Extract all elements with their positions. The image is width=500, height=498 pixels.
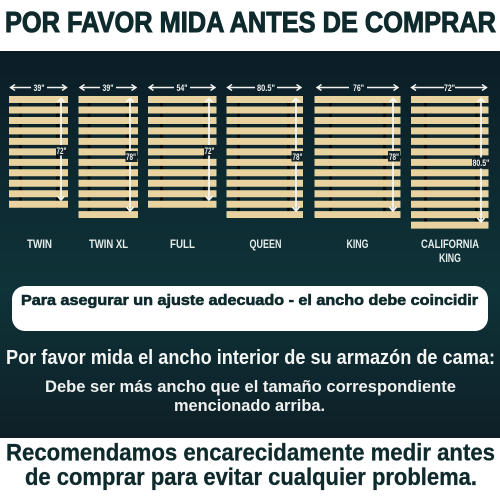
length arrow: 72 in: 72"	[204, 146, 214, 157]
length arrow: 78 in	[292, 98, 303, 211]
text block: must be wider: Debe ser más ancho que el tamaño correspondiente	[45, 378, 456, 396]
label: california king: CALIFORNIA	[421, 239, 479, 251]
callout text: Para asegurar un ajuste adecuado - el ancho debe coincidir	[21, 292, 478, 309]
panel: twin size	[10, 83, 68, 251]
length arrow: 72 in	[56, 98, 68, 200]
length arrow: 78 in	[388, 98, 400, 211]
slatted frame: queen	[237, 96, 290, 218]
header band	[0, 0, 500, 51]
panel: full size	[149, 83, 216, 251]
slatted frame: king	[329, 96, 386, 218]
label: california king	[421, 239, 479, 265]
label: twin xl: TWIN XL	[89, 239, 128, 251]
length arrow: 72 in: 72"	[56, 146, 66, 157]
label: queen: QUEEN	[250, 239, 282, 251]
width arrow: 72 in	[412, 83, 487, 94]
footer band	[0, 438, 500, 498]
length arrow: 78 in: 78"	[292, 152, 302, 163]
width arrow: 80.5 in: 80.5"	[257, 83, 275, 94]
width arrow: 76 in: 76"	[353, 83, 364, 94]
length arrow: 72 in	[204, 98, 216, 200]
width arrow: 54 in: 54"	[176, 83, 188, 94]
callout: width must match	[12, 286, 488, 331]
width arrow: 80.5 in	[228, 83, 302, 94]
slatted frame: twin	[19, 96, 59, 208]
label: california king: KING	[439, 253, 461, 265]
width arrow: 39 in: 39"	[102, 83, 114, 94]
length arrow: 78 in	[126, 98, 138, 211]
length arrow: 78 in: 78"	[389, 152, 399, 163]
dark background panel	[0, 51, 500, 438]
panel: twin xl size	[80, 83, 138, 251]
text block: must be wider	[45, 378, 456, 415]
label: king: KING	[346, 239, 369, 251]
panel: king size	[317, 83, 400, 251]
length arrow: 78 in: 78"	[126, 152, 136, 163]
panel: queen size	[228, 83, 303, 251]
label: twin: TWIN	[27, 239, 52, 251]
width arrow: 39 in: 39"	[34, 83, 44, 94]
width arrow: 39 in	[80, 83, 136, 94]
length arrow: 80.5 in	[472, 98, 490, 222]
length arrow: 80.5 in: 80.5"	[472, 158, 490, 169]
width arrow: 54 in	[149, 83, 216, 94]
slatted frame: twin xl	[88, 96, 129, 218]
slatted frame: full	[160, 96, 206, 208]
footer recommendation text	[6, 440, 495, 491]
text block: must be wider: mencionado arriba.	[174, 397, 325, 415]
label: full: FULL	[170, 239, 195, 251]
width arrow: 72 in: 72"	[444, 83, 455, 94]
slatted frame: california king	[424, 96, 478, 229]
width arrow: 76 in	[317, 83, 398, 94]
panel: california king size	[412, 83, 490, 265]
width arrow: 39 in	[10, 83, 67, 94]
